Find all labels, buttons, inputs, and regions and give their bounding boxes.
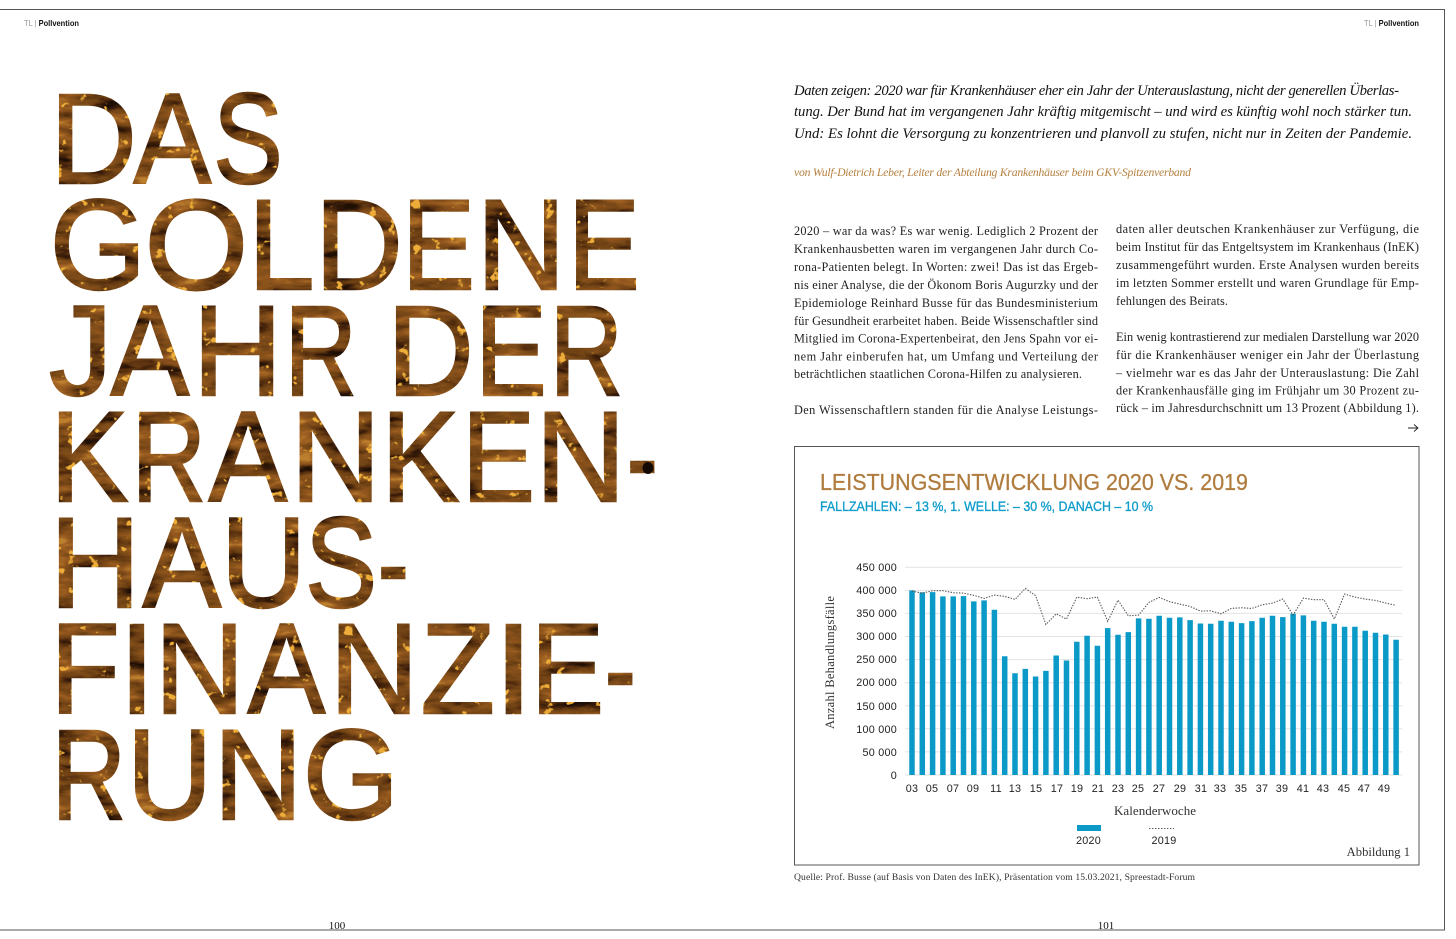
headline line: GOLDENE: E <box>568 174 640 317</box>
x axis labels: 03 <box>906 783 918 795</box>
headline line: KRANKEN-: K <box>381 386 459 529</box>
intro text: tung. Der Bund hat im vergangenen Jahr kräftig mitgemischt – und wird es künftig wohl noch stärker tun. <box>794 104 1412 120</box>
headline line: JAHR DER: R <box>550 280 623 423</box>
headline line: JAHR DER: A <box>111 280 190 423</box>
body text column 2: der Krankenhausfälle ging im Frühjahr um 30 Prozent zu- <box>1116 384 1419 398</box>
body text column 2: fehlungen des Beirats. <box>1116 294 1228 308</box>
headline line: RUNG <box>52 704 399 847</box>
intro text: Und: Es lohnt die Versorgung zu konzentrieren und planvoll zu stufen, nicht nur in Zeiten der Pandemie. <box>794 126 1412 142</box>
headline line: FINANZIE- <box>51 598 636 741</box>
running header left: TL | Pollvention <box>24 18 79 28</box>
headline line: DAS: S <box>213 68 283 211</box>
x axis labels: 41 <box>1297 783 1309 795</box>
headline line: FINANZIE-: - <box>605 598 636 741</box>
headline line: KRANKEN-: N <box>290 386 381 529</box>
body text column 1: 2020 – war da was? Es war wenig. Lediglich 2 Prozent der <box>794 224 1098 238</box>
x axis labels: 37 <box>1256 783 1268 795</box>
body text column 1: rona-Patienten belegt. In Worten: zwei! Das ist das Ergeb- <box>794 260 1098 274</box>
chart subtitle: FALLZAHLEN: – 13 %, 1. WELLE: – 30 %, DANACH – 10 % <box>820 498 1153 514</box>
headline line: HAUS-: A <box>143 492 222 635</box>
headline line: KRANKEN-: K <box>50 386 128 529</box>
headline line: KRANKEN-: N <box>536 386 626 529</box>
y axis title: Anzahl Behandlungsfälle <box>823 596 837 729</box>
headline line: HAUS-: H <box>50 492 140 635</box>
running header right: TL | Pollvention <box>1364 18 1419 28</box>
legend 2020: 2020 <box>1076 835 1101 847</box>
headline line: FINANZIE-: A <box>248 598 326 741</box>
headline line: FINANZIE-: I <box>119 598 155 741</box>
x axis labels: 09 <box>967 783 979 795</box>
legend 2020 <box>1076 825 1101 847</box>
y axis labels: 100 000 <box>856 724 897 736</box>
headline line: GOLDENE: N <box>477 174 566 317</box>
y axis labels: 150 000 <box>856 701 897 713</box>
y axis labels: 400 000 <box>856 585 897 597</box>
headline line: RUNG: N <box>214 704 302 847</box>
body text column 1: Epidemiologe Reinhard Busse für das Bundesministerium <box>794 296 1098 310</box>
headline line: KRANKEN- <box>50 386 658 529</box>
x axis labels: 33 <box>1214 783 1226 795</box>
x axis labels: 35 <box>1235 783 1247 795</box>
x axis labels: 47 <box>1358 783 1370 795</box>
x axis labels: 23 <box>1112 783 1124 795</box>
body text column 2: Ein wenig kontrastierend zur medialen Darstellung war 2020 <box>1116 330 1419 344</box>
y axis labels: 300 000 <box>856 631 897 643</box>
y axis labels: 50 000 <box>862 747 897 759</box>
icon: continuation arrow <box>1408 424 1418 432</box>
headline line: DAS: D <box>50 68 137 211</box>
headline line: KRANKEN-: R <box>132 386 206 529</box>
headline <box>49 68 658 847</box>
body text column 2: im letzten Sommer erstellt und waren Grundlage für Emp- <box>1116 276 1419 290</box>
headline line: JAHR DER: R <box>285 280 357 423</box>
headline line: FINANZIE-: N <box>330 598 418 741</box>
x axis labels: 07 <box>947 783 959 795</box>
headline line: DAS: A <box>134 68 212 211</box>
headline line: JAHR DER: H <box>193 280 282 423</box>
body text column 2 <box>1115 222 1420 415</box>
x axis labels: 13 <box>1009 783 1021 795</box>
body text column 2: daten aller deutschen Krankenhäuser zur Verfügung, die <box>1116 222 1420 236</box>
headline line: GOLDENE: G <box>50 174 146 317</box>
headline line: KRANKEN-: A <box>209 386 288 529</box>
x axis labels: 25 <box>1132 783 1144 795</box>
body text column 1: Krankenhausbetten waren im vergangenen Jahr durch Co- <box>794 242 1098 256</box>
headline line: FINANZIE-: F <box>51 598 120 741</box>
intro text <box>793 82 1412 142</box>
headline line: GOLDENE: O <box>144 174 248 317</box>
headline line: DAS <box>50 68 283 211</box>
x axis labels: 39 <box>1276 783 1288 795</box>
headline line: JAHR DER: J <box>49 280 113 423</box>
x axis labels: 15 <box>1030 783 1042 795</box>
headline line: FINANZIE-: I <box>494 598 533 741</box>
x axis labels: 19 <box>1071 783 1083 795</box>
x axis labels: 27 <box>1153 783 1165 795</box>
body text column 2: beim Institut für das Entgeltsystem im Krankenhaus (InEK) <box>1116 240 1419 254</box>
headline line: GOLDENE: D <box>315 174 403 317</box>
dark spot in hyphen <box>642 462 654 474</box>
x axis labels <box>906 783 1390 795</box>
source note: Quelle: Prof. Busse (auf Basis von Daten des InEK), Präsentation vom 15.03.2021, Spreestadt-Forum <box>794 872 1196 883</box>
headline line: HAUS-: - <box>378 492 409 635</box>
headline line: KRANKEN-: - <box>627 386 658 529</box>
body text column 2: – vielmehr war es das Jahr der Unterauslastung: Die Zahl <box>1115 366 1420 380</box>
headline line: JAHR DER: E <box>475 280 547 423</box>
panel: chart <box>794 446 1419 865</box>
headline line: HAUS-: S <box>305 492 377 635</box>
y axis labels: 450 000 <box>856 562 897 574</box>
body text column 2: für die Krankenhäuser weniger ein Jahr der Überlastung <box>1116 348 1419 362</box>
headline line: HAUS- <box>50 492 409 635</box>
headline line: RUNG: G <box>303 704 399 847</box>
y axis labels: 200 000 <box>856 677 897 689</box>
grid lines <box>905 567 1402 775</box>
body text column 1: für Gesundheit erarbeitet haben. Beide Wissenschaftler sind <box>794 314 1098 328</box>
headline line: KRANKEN-: E <box>462 386 535 529</box>
headline line: FINANZIE-: N <box>154 598 245 741</box>
body text column 1: nis einer Analyse, die der Ökonom Boris Augurzky und der <box>794 278 1098 292</box>
headline line: FINANZIE-: E <box>531 598 604 741</box>
y axis labels: 250 000 <box>856 654 897 666</box>
x axis labels: 43 <box>1317 783 1329 795</box>
body text column 2: rück – im Jahresdurchschnitt um 13 Prozent (Abbildung 1). <box>1116 401 1419 415</box>
figure label: Abbildung 1 <box>1347 845 1410 859</box>
y axis labels: 0 <box>891 770 897 782</box>
body text column 1: Den Wissenschaftlern standen für die Analyse Leistungs- <box>794 403 1098 417</box>
headline line: GOLDENE: L <box>248 174 314 317</box>
page number right: 101 <box>1098 920 1114 932</box>
page number left: 100 <box>329 920 346 932</box>
author line: von Wulf-Dietrich Leber, Leiter der Abteilung Krankenhäuser beim GKV-Spitzenverband <box>794 166 1191 179</box>
x axis labels: 05 <box>926 783 938 795</box>
body text column 1: Mitglied im Corona-Expertenbeirat, den Jens Spahn vor ei- <box>794 332 1098 346</box>
x axis labels: 31 <box>1195 783 1207 795</box>
line 2019 <box>912 588 1396 624</box>
body text column 1: beträchtlichen staatlichen Corona-Hilfen zu analysieren. <box>794 367 1082 381</box>
headline line: RUNG: U <box>127 704 212 847</box>
y axis labels <box>856 562 897 782</box>
headline line: GOLDENE <box>50 174 640 317</box>
headline line: JAHR DER: D <box>387 280 474 423</box>
bars 2020 <box>909 590 1399 775</box>
legend 2019 <box>1149 828 1177 847</box>
x axis labels: 21 <box>1092 783 1104 795</box>
body text column 2: zusammengeführt wurden. Erste Analysen wurden bereits <box>1116 258 1419 272</box>
x axis labels: 29 <box>1174 783 1186 795</box>
legend 2019: 2019 <box>1151 835 1177 847</box>
x axis labels: 45 <box>1338 783 1350 795</box>
chart title: LEISTUNGSENTWICKLUNG 2020 VS. 2019 <box>820 469 1248 495</box>
intro text: Daten zeigen: 2020 war für Krankenhäuser eher ein Jahr der Unterauslastung, nicht der generellen Überlas- <box>793 82 1399 99</box>
headline line: HAUS-: U <box>221 492 306 635</box>
headline line: FINANZIE-: Z <box>421 598 495 741</box>
headline line: RUNG: R <box>52 704 126 847</box>
x axis labels: 49 <box>1378 783 1390 795</box>
x axis labels: 11 <box>990 783 1002 795</box>
x axis title: Kalenderwoche <box>1114 803 1196 818</box>
body text column 1 <box>794 224 1098 417</box>
y axis labels: 350 000 <box>856 608 897 620</box>
x axis labels: 17 <box>1051 783 1063 795</box>
headline line: GOLDENE: E <box>402 174 475 317</box>
body text column 1: nem Jahr einberufen hat, um Umfang und Verteilung der <box>794 350 1098 364</box>
headline line: JAHR DER <box>49 280 623 423</box>
chart frame <box>794 446 1419 865</box>
